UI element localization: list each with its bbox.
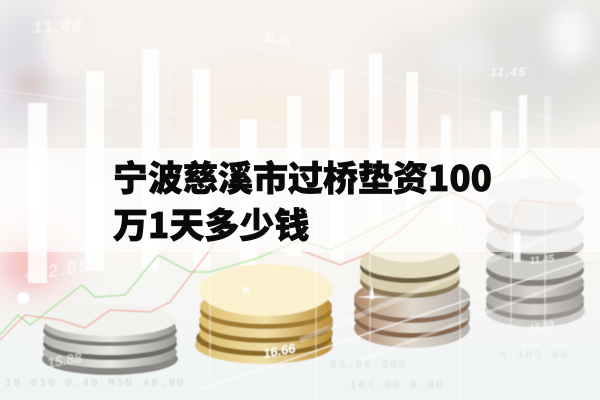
ledger paper digits: 4 183.00	[500, 350, 569, 362]
lens flare sparkles	[17, 284, 388, 304]
translucent title band	[0, 148, 600, 252]
floating price numbers: 11.48	[262, 31, 292, 50]
coin stack: grey silver	[485, 178, 585, 327]
grid lines	[0, 0, 600, 170]
green trend line	[0, 150, 560, 335]
coin value labels: 16.69	[528, 319, 556, 335]
floating price numbers: +32.66	[262, 260, 294, 275]
ledger paper digits	[5, 350, 569, 392]
floating price numbers: 11.48	[32, 15, 84, 37]
floating price numbers: 11.45	[490, 65, 527, 79]
coin value labels: 11.45	[529, 253, 555, 267]
bokeh circle	[44, 21, 98, 75]
title: 宁波慈溪市过桥垫资100万1天多少钱	[113, 151, 492, 249]
white diagonal streaks	[200, 180, 600, 400]
floating price numbers	[22, 15, 527, 286]
coin value labels	[46, 253, 556, 371]
coin value labels: 15.88	[46, 349, 83, 371]
floating price numbers: +22.55	[22, 255, 92, 286]
coin stack: mixed copper and silver	[354, 218, 470, 348]
ledger paper digits: 100.00 0.00	[350, 380, 445, 392]
red trend line	[0, 190, 570, 340]
coin value labels: 16.66	[262, 340, 297, 361]
ledger paper digits: 83.00 300	[330, 360, 407, 372]
white bar chart	[28, 49, 551, 283]
ledger paper digits: 10 010 0.40 MSN 40.90	[5, 378, 186, 390]
coin stack: gold	[195, 264, 333, 364]
coin stack: silver	[42, 304, 178, 375]
background colour haze	[0, 0, 600, 295]
